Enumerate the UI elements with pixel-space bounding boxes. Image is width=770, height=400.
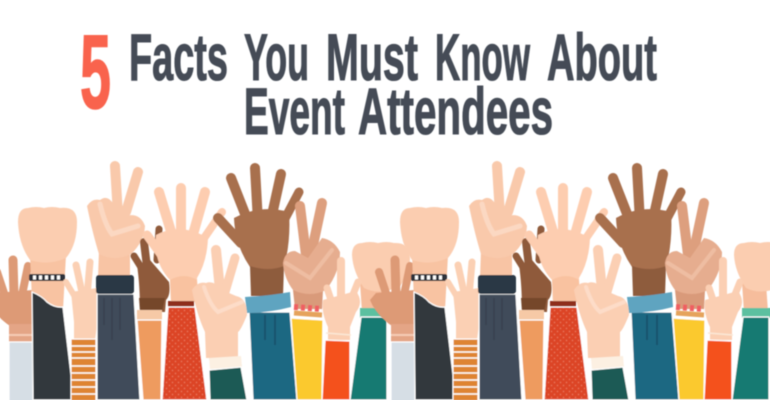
hand: large brown open hand with blue sleeve	[218, 168, 299, 400]
bracelet	[294, 307, 322, 309]
title line 1	[129, 20, 657, 94]
bracelet	[29, 274, 65, 281]
hand: fist with teal sleeve	[350, 242, 410, 400]
hand: front peace hand with green sleeve	[192, 250, 247, 400]
title line 1: Must	[326, 20, 418, 94]
title line 1: You	[244, 20, 309, 94]
hand: small orange hand with pale sleeve	[0, 260, 33, 400]
raised hands group, first set	[0, 166, 410, 400]
title line 1: About	[547, 20, 657, 94]
title line 2	[244, 74, 553, 148]
title line 1: Know	[435, 20, 530, 94]
hand: brown peace hand with orange sleeve	[134, 229, 170, 400]
hand: small light peace hand with striped sleeve	[66, 262, 97, 400]
hand: fist with studded bracelet and black sleeve	[18, 207, 77, 400]
hand: peace sign with navy sleeve	[87, 166, 145, 400]
hand: small light hand with orange sleeve	[322, 261, 360, 400]
hand: tan peace hand with beaded bracelet and yellow sleeve	[283, 203, 340, 400]
title line 2: Event	[244, 74, 345, 148]
title number 5: 5	[80, 14, 111, 131]
raised hands group, repeated set	[370, 166, 770, 400]
title line 2: Attendees	[358, 74, 553, 148]
title	[80, 14, 657, 148]
hand: open light hand with red sleeve	[147, 188, 222, 400]
title line 1: Facts	[129, 20, 228, 94]
